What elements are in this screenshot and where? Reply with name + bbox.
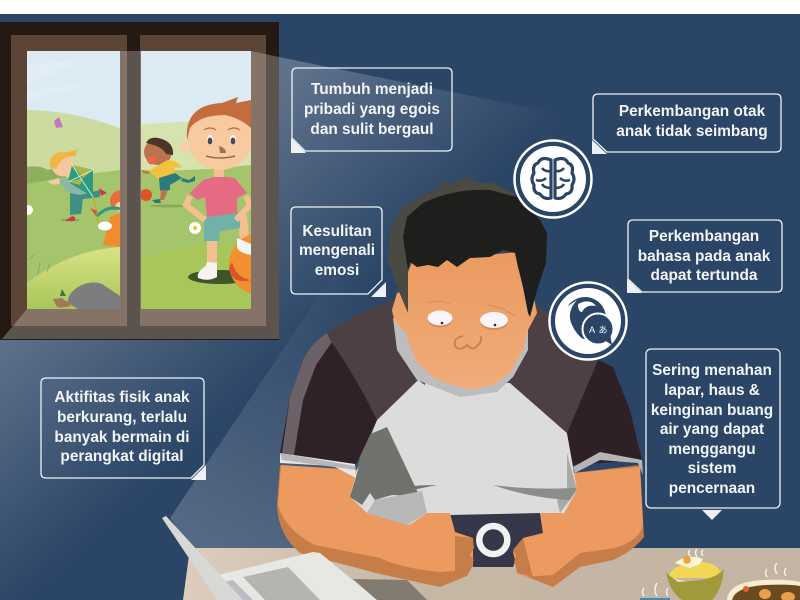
daisy	[27, 205, 33, 215]
left sleeve	[280, 333, 377, 478]
icon: language	[550, 282, 626, 360]
window	[0, 22, 291, 340]
callout: language: bahasa pada anak	[638, 248, 771, 265]
callout: physical activity	[41, 378, 206, 480]
callout: brain: Perkembangan otak	[619, 103, 766, 120]
person	[277, 177, 644, 587]
boy with ball	[179, 97, 251, 294]
callout: brain	[592, 94, 781, 154]
callout: social: pribadi yang egois	[304, 101, 440, 118]
shirt shadows	[350, 427, 577, 525]
callout: physical activity: Aktifitas fisik anak	[54, 389, 190, 406]
laptop	[162, 516, 427, 600]
running boy	[140, 138, 195, 203]
callout: language: Perkembangan	[649, 228, 759, 245]
daisy	[189, 222, 201, 234]
left arm	[277, 465, 475, 587]
light beam from window	[0, 57, 600, 600]
callout: language: dapat tertunda	[651, 267, 758, 284]
food: curry bowl	[727, 563, 800, 600]
girl	[90, 190, 120, 247]
callout: digestion: keinginan buang	[651, 402, 773, 419]
rock	[68, 282, 120, 309]
window frame	[0, 22, 279, 340]
right fist	[513, 513, 575, 578]
callout: emotion: mengenali	[299, 242, 375, 259]
right sleeve	[567, 360, 643, 475]
callout: digestion: lapar, haus &	[664, 382, 760, 399]
callout: social: Tumbuh menjadi	[311, 81, 433, 98]
food: rice bowl	[666, 549, 724, 600]
shoulder panels	[327, 300, 598, 433]
left fist	[405, 513, 474, 573]
eyes and mouth	[427, 301, 515, 349]
right arm	[513, 465, 644, 587]
callout: digestion: Sering menahan	[652, 362, 772, 379]
icon: language: あ	[598, 325, 608, 335]
collar	[393, 318, 528, 397]
callout: physical activity: perangkat digital	[60, 448, 184, 465]
light beam from laptop	[170, 250, 450, 548]
callout: digestion	[646, 349, 780, 520]
callout: digestion: pencernaan	[669, 480, 755, 497]
laptop screen	[162, 516, 243, 600]
callout: brain: anak tidak seimbang	[616, 123, 768, 140]
outdoor scene left pane	[27, 51, 120, 309]
callout: language	[627, 220, 782, 293]
game device	[437, 513, 543, 567]
kid with kite	[48, 149, 108, 228]
callout: social	[291, 68, 452, 153]
laptop base	[218, 552, 377, 600]
icon: language: A	[589, 325, 596, 336]
callout: emotion: Kesulitan	[302, 223, 372, 240]
callout: digestion: sistem	[688, 460, 736, 477]
table	[183, 548, 800, 600]
outdoor scene right pane	[141, 51, 251, 309]
callout: emotion	[291, 207, 386, 297]
butterfly	[54, 117, 63, 128]
callout: physical activity: banyak bermain di	[54, 429, 190, 446]
callout: social: dan sulit bergaul	[310, 121, 434, 138]
callout: physical activity: berkurang, terlalu	[57, 409, 187, 426]
light on window frame	[2, 51, 279, 339]
top white band	[0, 0, 800, 14]
callout: digestion: menggangu	[668, 441, 756, 458]
callout: emotion: emosi	[315, 262, 359, 279]
t-shirt torso	[350, 380, 577, 525]
hair	[388, 177, 547, 317]
food: soup dish	[640, 583, 670, 600]
face	[392, 252, 537, 390]
callout: digestion: air yang dapat	[660, 421, 764, 438]
icon: brain	[514, 140, 592, 218]
